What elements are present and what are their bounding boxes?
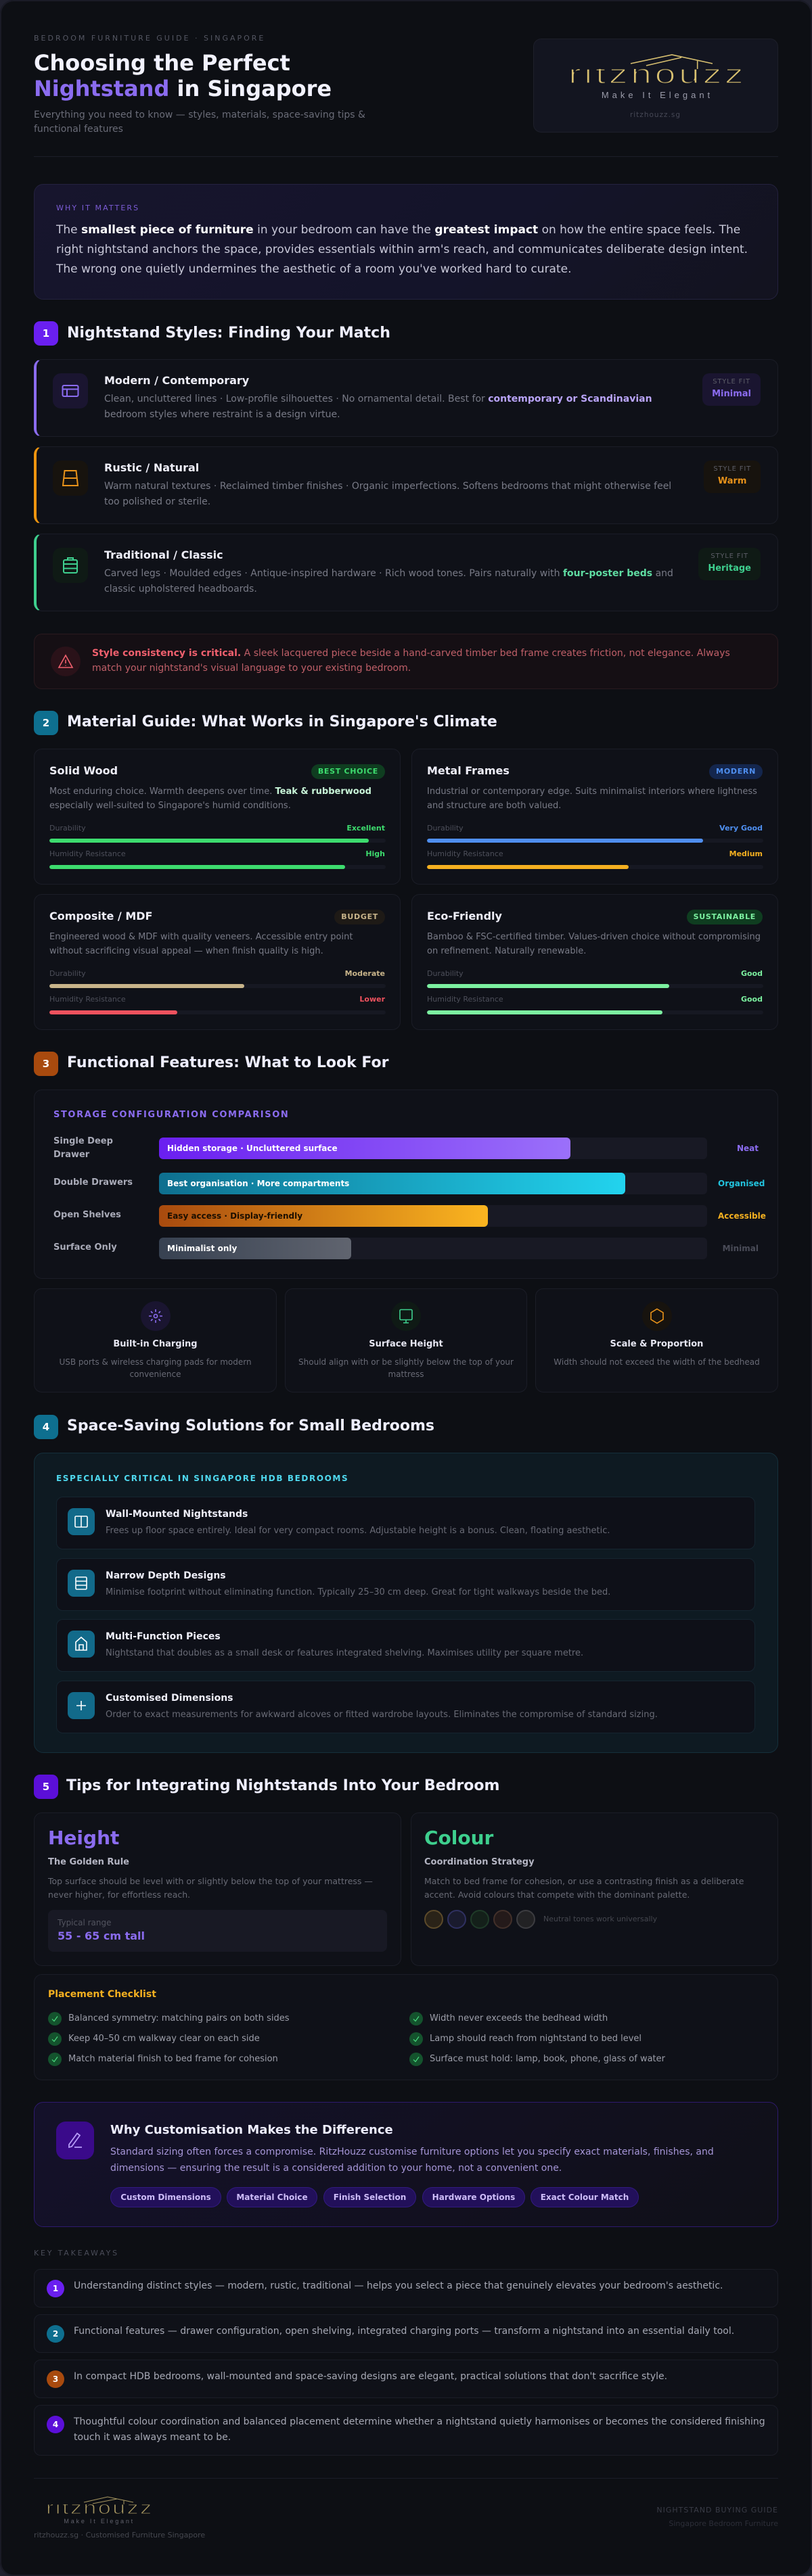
takeaway text: In compact HDB bedrooms, wall-mounted and space-saving designs are elegant, practical solutions that don't sacrifice style. bbox=[74, 2371, 667, 2382]
section 2 badge bbox=[34, 711, 58, 735]
chip: material choice: Material Choice bbox=[236, 2193, 308, 2202]
colour description: Match to bed frame for cohesion, or use a contrasting finish as a deliberate accent. Avoid colours that compete with the dominant palette. bbox=[424, 1876, 744, 1900]
icon: hexagon bbox=[641, 1301, 671, 1331]
tag: BUDGET bbox=[341, 912, 378, 921]
number: 4 bbox=[53, 2420, 58, 2429]
style fit pill: STYLE FIT bbox=[710, 553, 748, 560]
style title: Modern / Contemporary bbox=[104, 374, 249, 387]
key takeaways label: KEY TAKEAWAYS bbox=[34, 2249, 119, 2257]
subtitle: Everything you need to know — styles, materials, space-saving tips & functional features bbox=[34, 110, 365, 135]
material description: Most enduring choice. Warmth deepens over time. Teak & rubberwood especially well-suited to Singapore's humid conditions. bbox=[49, 787, 371, 811]
bar chart: Easy access · Display-friendly bbox=[167, 1211, 302, 1221]
section 1 badge: 1 bbox=[43, 327, 49, 339]
material title: Eco-Friendly bbox=[427, 910, 502, 922]
chip: custom dimensions bbox=[110, 2187, 221, 2207]
check icon bbox=[409, 2032, 423, 2046]
footer logo: ritzhouzz bbox=[46, 2499, 154, 2518]
icon: pen bbox=[56, 2122, 94, 2159]
item: customised dimensions bbox=[56, 1680, 755, 1733]
footer logo: Make It Elegant bbox=[64, 2518, 135, 2525]
feature description: USB ports & wireless charging pads for modern convenience bbox=[59, 1357, 252, 1379]
section 4 badge: 4 bbox=[43, 1421, 49, 1433]
item title: Wall-Mounted Nightstands bbox=[106, 1509, 248, 1520]
material card: solid wood: Durability bbox=[49, 824, 86, 833]
material card: composite: Lower bbox=[359, 995, 385, 1004]
takeaway text: Thoughtful colour coordination and balanced placement determine whether a nightstand quietly harmonises or becomes the considered finishing touch it was always meant to be. bbox=[74, 2416, 765, 2443]
number bbox=[47, 2325, 64, 2343]
bar chart: Minimalist only bbox=[167, 1244, 237, 1253]
material title: Solid Wood bbox=[49, 764, 118, 777]
material title: Metal Frames bbox=[427, 764, 510, 777]
section 4 badge bbox=[34, 1415, 58, 1439]
footer logo bbox=[47, 2497, 150, 2525]
title bbox=[34, 50, 332, 101]
material card: eco-friendly bbox=[411, 894, 778, 1030]
callout text: Style consistency is critical. A sleek lacquered piece beside a hand-carved timber bed frame creates friction, not elegance. Always bbox=[92, 648, 730, 659]
takeaway text: Understanding distinct styles — modern, rustic, traditional — helps you select a piece that genuinely elevates your bedroom's aesthetic. bbox=[74, 2280, 723, 2291]
subheading: Coordination Strategy bbox=[424, 1857, 535, 1867]
material card: eco-friendly: Durability bbox=[427, 969, 464, 978]
panel: placement checklist: Lamp should reach from nightstand to bed level bbox=[430, 2034, 641, 2044]
why label: WHY IT MATTERS bbox=[56, 204, 139, 212]
panel: storage comparison bbox=[34, 1090, 778, 1279]
style title: Rustic / Natural bbox=[104, 461, 199, 474]
material card: metal frames: Humidity Resistance bbox=[427, 849, 503, 858]
icon: timber stand bbox=[53, 461, 88, 496]
feature description: Should align with or be slightly below the top of your mattress bbox=[298, 1357, 514, 1379]
feature title: Scale & Proportion bbox=[610, 1339, 703, 1349]
icon: warning bbox=[51, 647, 81, 676]
panel: placement checklist: Surface must hold: lamp, book, phone, glass of water bbox=[430, 2054, 665, 2064]
material card: solid wood: High bbox=[365, 849, 385, 858]
material card: composite: Moderate bbox=[345, 969, 385, 978]
material card: metal frames: Medium bbox=[729, 849, 763, 858]
material card: solid wood: Excellent bbox=[346, 824, 385, 833]
item title: Multi-Function Pieces bbox=[106, 1631, 221, 1642]
takeaway text: Functional features — drawer configuration, open shelving, integrated charging ports — transform a nightstand into an essential daily tool. bbox=[74, 2326, 734, 2337]
tag: BEST CHOICE bbox=[318, 767, 378, 776]
swatch note: Neutral tones work universally bbox=[543, 1915, 657, 1923]
material card: eco-friendly: Humidity Resistance bbox=[427, 995, 503, 1004]
footer right subtitle: Singapore Bedroom Furniture bbox=[669, 2519, 778, 2528]
material card: composite: Humidity Resistance bbox=[49, 995, 126, 1004]
style fit pill: Heritage bbox=[708, 563, 751, 573]
panel: colour tip bbox=[411, 1812, 778, 1966]
section 5 heading: Tips for Integrating Nightstands Into Your Bedroom bbox=[66, 1777, 499, 1794]
item title: Customised Dimensions bbox=[106, 1692, 233, 1703]
custom title: Why Customisation Makes the Difference bbox=[110, 2123, 393, 2137]
chip: material choice bbox=[227, 2187, 317, 2207]
tag: MODERN bbox=[716, 767, 756, 776]
style fit pill: STYLE FIT bbox=[713, 378, 750, 385]
feature title: Surface Height bbox=[369, 1339, 443, 1349]
section 2 heading: Material Guide: What Works in Singapore's Climate bbox=[67, 713, 497, 730]
style fit pill: Minimal bbox=[712, 389, 751, 399]
number: 1 bbox=[53, 2284, 58, 2293]
logo: ritzhouzz: Make It Elegant bbox=[602, 90, 713, 100]
number bbox=[47, 2370, 64, 2388]
panel: height tip bbox=[34, 1812, 401, 1966]
bar chart: Surface Only bbox=[53, 1242, 117, 1252]
item: narrow depth bbox=[56, 1558, 755, 1611]
bar chart: Minimal bbox=[723, 1244, 759, 1253]
section 3 heading: Functional Features: What to Look For bbox=[67, 1054, 388, 1071]
callout text bbox=[92, 648, 730, 674]
style description: Warm natural textures · Reclaimed timber finishes · Organic imperfections. Softens bedrooms that might otherwise feel too polished or sterile. bbox=[104, 481, 671, 507]
section 3 badge bbox=[34, 1052, 58, 1076]
style fit pill bbox=[702, 373, 761, 406]
takeaway 4 bbox=[34, 2405, 778, 2456]
chip: finish selection bbox=[323, 2187, 416, 2207]
check icon bbox=[409, 2012, 423, 2025]
title: Choosing the Perfect bbox=[34, 50, 290, 76]
feature card: surface height bbox=[285, 1288, 527, 1392]
subheading: The Golden Rule bbox=[48, 1857, 129, 1867]
chart heading: STORAGE CONFIGURATION COMPARISON bbox=[53, 1110, 289, 1120]
colour heading: Colour bbox=[424, 1827, 493, 1849]
height description: Top surface should be level with or slightly below the top of your mattress — never higher, for effortless reach. bbox=[48, 1876, 373, 1900]
bar chart bbox=[53, 1136, 766, 1259]
intro text: The smallest piece of furniture in your bedroom can have the greatest impact on how the entire space feels. The right nightstand anchors the space, provides essentials within arm's reach, and communicates deliberate design intent. The wrong one quietly undermines the aesthetic of a room you've worked hard to curate. bbox=[56, 223, 748, 276]
chip: exact colour match bbox=[531, 2187, 639, 2207]
feature title: Built-in Charging bbox=[113, 1339, 198, 1349]
feature description: Width should not exceed the width of the bedhead bbox=[554, 1357, 760, 1367]
bar chart: Single Deep Drawer bbox=[53, 1136, 113, 1159]
section 1 badge bbox=[34, 321, 58, 346]
number: 3 bbox=[53, 2374, 58, 2384]
panel: placement checklist: Match material finish to bed frame for cohesion bbox=[68, 2054, 278, 2064]
style fit pill: STYLE FIT bbox=[713, 465, 751, 473]
callout: style consistency bbox=[34, 634, 778, 689]
panel: why it matters bbox=[34, 184, 778, 300]
height heading: Height bbox=[48, 1827, 119, 1849]
chip: custom dimensions: Custom Dimensions bbox=[120, 2193, 211, 2202]
tag bbox=[334, 910, 385, 924]
feature card: scale and proportion bbox=[535, 1288, 778, 1392]
material card: eco-friendly: Good bbox=[741, 995, 763, 1004]
item: wall-mounted bbox=[56, 1497, 755, 1549]
icon: wall unit bbox=[68, 1508, 95, 1535]
bar chart: Accessible bbox=[718, 1211, 766, 1221]
style fit pill bbox=[698, 548, 761, 580]
custom description: Standard sizing often forces a compromise. RitzHouzz customise furniture options let you specify exact materials, finishes, and dimensions — ensuring the result is a considered addition to your home, not a convenient one. bbox=[110, 2147, 714, 2174]
header bbox=[34, 34, 778, 135]
typical range box bbox=[48, 1910, 387, 1952]
item: multi-function bbox=[56, 1619, 755, 1672]
panel: placement checklist bbox=[34, 1974, 778, 2080]
material card: eco-friendly: Good bbox=[741, 969, 763, 978]
chip: exact colour match: Exact Colour Match bbox=[541, 2193, 629, 2202]
material card: composite bbox=[34, 894, 401, 1030]
section 5 badge: 5 bbox=[43, 1781, 49, 1793]
section 2 badge: 2 bbox=[43, 717, 49, 729]
style card: rustic bbox=[34, 446, 778, 524]
icon: plus bbox=[68, 1692, 95, 1719]
item text: Order to exact measurements for awkward alcoves or fitted wardrobe layouts. Eliminates the compromise of standard sizing. bbox=[106, 1710, 658, 1719]
takeaway 1 bbox=[34, 2269, 778, 2308]
bar chart: Open Shelves bbox=[53, 1210, 121, 1220]
panel heading: ESPECIALLY CRITICAL IN SINGAPORE HDB BEDROOMS bbox=[56, 1474, 348, 1483]
material title: Composite / MDF bbox=[49, 910, 152, 922]
style description: Carved legs · Moulded edges · Antique-inspired hardware · Rich wood tones. Pairs naturally with four-poster beds and classic upholstered headboards. bbox=[104, 568, 673, 594]
tag bbox=[709, 764, 763, 779]
tag bbox=[311, 764, 385, 779]
footer right title: NIGHTSTAND BUYING GUIDE bbox=[656, 2506, 778, 2514]
item text: Minimise footprint without eliminating function. Typically 25–30 cm deep. Great for tight walkways beside the bed. bbox=[106, 1587, 610, 1597]
icon: classic cabinet bbox=[53, 548, 88, 583]
bar chart: Hidden storage · Uncluttered surface bbox=[167, 1144, 338, 1153]
panel: placement checklist: Balanced symmetry: matching pairs on both sides bbox=[68, 2013, 290, 2023]
item text: Nightstand that doubles as a small desk or features integrated shelving. Maximises utility per square metre. bbox=[106, 1648, 583, 1658]
icon: layout bbox=[53, 373, 88, 408]
typical range box: Typical range bbox=[58, 1918, 112, 1927]
number bbox=[47, 2416, 64, 2433]
logo: ritzhouzz: ritzhouzz bbox=[568, 60, 746, 89]
icon: house bbox=[68, 1631, 95, 1658]
takeaway 2 bbox=[34, 2314, 778, 2353]
chip: finish selection: Finish Selection bbox=[334, 2193, 406, 2202]
typical range box: 55 - 65 cm tall bbox=[58, 1929, 145, 1942]
takeaway 3 bbox=[34, 2360, 778, 2398]
footer bbox=[34, 2497, 778, 2539]
style fit pill: Warm bbox=[718, 476, 746, 486]
number: 2 bbox=[53, 2329, 58, 2339]
material description: Industrial or contemporary edge. Suits minimalist interiors where lightness and structure are both valued. bbox=[427, 787, 757, 811]
icon: charging bbox=[141, 1301, 171, 1331]
tag bbox=[687, 910, 763, 924]
material card: solid wood: Humidity Resistance bbox=[49, 849, 126, 858]
style card: traditional bbox=[34, 534, 778, 611]
material card: metal frames: Durability bbox=[427, 824, 464, 833]
title: Nightstand in Singapore bbox=[34, 76, 332, 101]
item text: Frees up floor space entirely. Ideal for very compact rooms. Adjustable height is a bonus. Clean, floating aesthetic. bbox=[106, 1526, 610, 1536]
bar chart: Double Drawers bbox=[53, 1177, 133, 1188]
footer left text: ritzhouzz.sg · Customised Furniture Singapore bbox=[34, 2531, 205, 2539]
material card: metal frames: Very Good bbox=[719, 824, 763, 833]
style title: Traditional / Classic bbox=[104, 548, 223, 561]
style description: Clean, uncluttered lines · Low-profile silhouettes · No ornamental detail. Best for contemporary or Scandinavian bedroom styles where restraint is a design virtue. bbox=[104, 394, 652, 420]
checklist heading: Placement Checklist bbox=[48, 1989, 156, 2000]
chip: hardware options: Hardware Options bbox=[432, 2193, 515, 2202]
material description: Engineered wood & MDF with quality veneers. Accessible entry point without sacrificing visual appeal — when finish quality is high. bbox=[49, 932, 353, 956]
style card: modern bbox=[34, 359, 778, 437]
section 3 badge: 3 bbox=[43, 1058, 49, 1070]
material card: metal frames bbox=[411, 749, 778, 885]
check icon bbox=[409, 2053, 423, 2066]
callout text: match your nightstand's visual language to your existing bedroom. bbox=[92, 663, 411, 674]
logo panel bbox=[533, 39, 778, 133]
check icon bbox=[48, 2032, 62, 2046]
number bbox=[47, 2280, 64, 2297]
style fit pill bbox=[704, 461, 761, 493]
logo: ritzhouzz bbox=[571, 54, 741, 119]
icon: monitor bbox=[391, 1301, 421, 1331]
panel: placement checklist: Keep 40–50 cm walkway clear on each side bbox=[68, 2034, 260, 2044]
colour swatches bbox=[424, 1910, 535, 1929]
chip: hardware options bbox=[422, 2187, 525, 2207]
section 5 badge bbox=[34, 1775, 58, 1799]
check icon bbox=[48, 2053, 62, 2066]
panel: placement checklist: Width never exceeds the bedhead width bbox=[430, 2013, 608, 2023]
item title: Narrow Depth Designs bbox=[106, 1570, 226, 1581]
panel: space-saving bbox=[34, 1453, 778, 1753]
section 1 heading: Nightstand Styles: Finding Your Match bbox=[67, 325, 390, 342]
bar chart: Neat bbox=[737, 1144, 759, 1153]
check icon bbox=[48, 2012, 62, 2025]
material card: composite: Durability bbox=[49, 969, 86, 978]
feature card: built-in charging bbox=[34, 1288, 277, 1392]
eyebrow label: BEDROOM FURNITURE GUIDE · SINGAPORE bbox=[34, 34, 265, 43]
logo: ritzhouzz: ritzhouzz.sg bbox=[630, 111, 681, 119]
panel: customisation bbox=[34, 2102, 778, 2227]
material card: solid wood bbox=[34, 749, 401, 885]
material description: Bamboo & FSC-certified timber. Values-driven choice without compromising on refinement. Naturally renewable. bbox=[427, 932, 761, 956]
tag: SUSTAINABLE bbox=[694, 912, 756, 921]
section 4 heading: Space-Saving Solutions for Small Bedrooms bbox=[67, 1418, 434, 1434]
bar chart: Organised bbox=[718, 1179, 765, 1188]
icon: narrow cabinet bbox=[68, 1569, 95, 1596]
bar chart: Best organisation · More compartments bbox=[167, 1179, 349, 1188]
